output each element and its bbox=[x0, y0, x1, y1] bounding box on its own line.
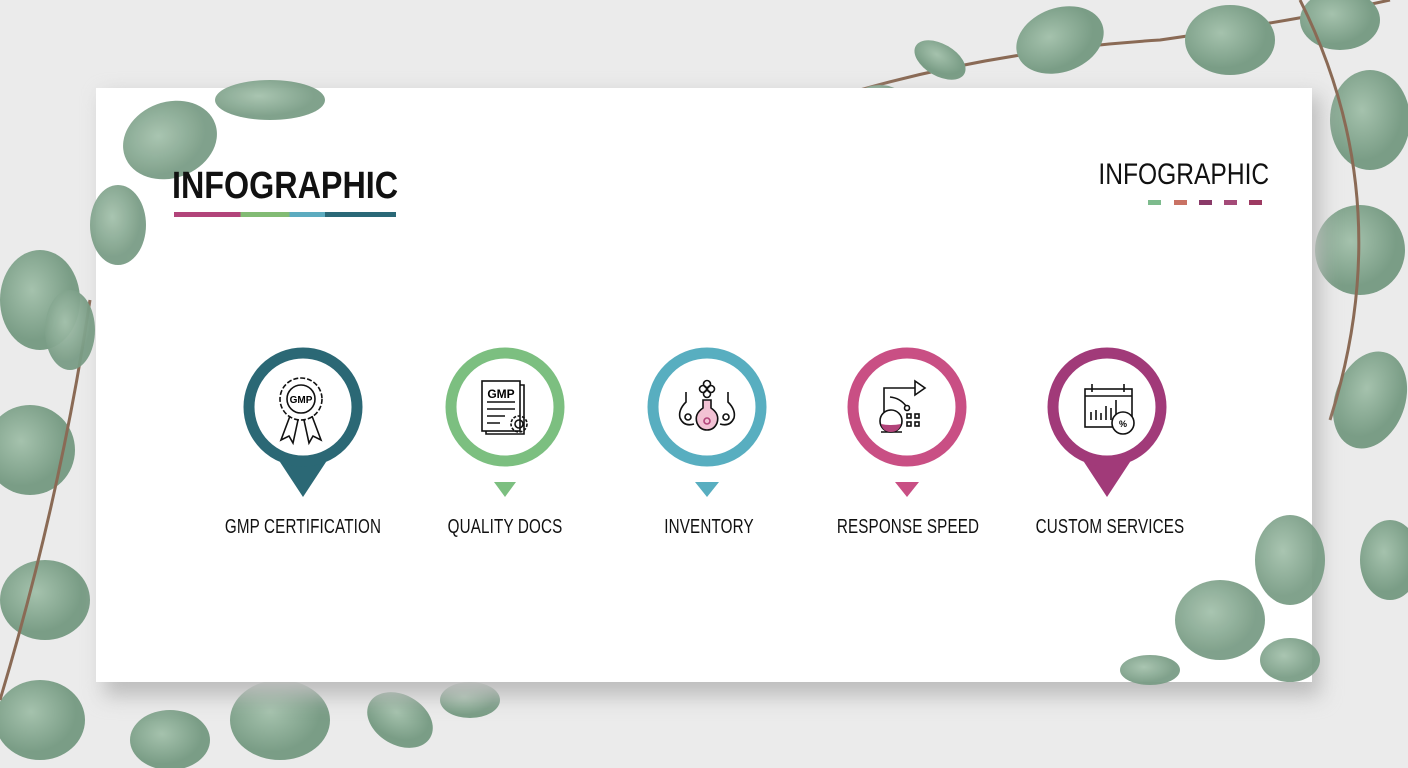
label: custom services: CUSTOM SERVICES bbox=[1036, 516, 1184, 538]
pin: custom services bbox=[1053, 353, 1161, 497]
label: quality docs: QUALITY DOCS bbox=[448, 516, 562, 538]
pin: quality docs: GMP bbox=[487, 387, 515, 401]
pin: GMP certification: GMP bbox=[290, 395, 313, 406]
pin: inventory bbox=[653, 353, 761, 497]
title left: INFOGRAPHIC bbox=[172, 165, 398, 207]
pin: GMP certification bbox=[249, 353, 357, 497]
label: GMP certification: GMP CERTIFICATION bbox=[225, 516, 381, 538]
white card bbox=[96, 88, 1312, 682]
pin: custom services: % bbox=[1119, 419, 1127, 429]
pin: quality docs bbox=[451, 353, 559, 497]
label: response speed: RESPONSE SPEED bbox=[837, 516, 979, 538]
pin: response speed bbox=[853, 353, 961, 497]
label: inventory: INVENTORY bbox=[664, 516, 754, 538]
title right: INFOGRAPHIC bbox=[1098, 158, 1269, 191]
card shadow bbox=[104, 96, 1320, 696]
